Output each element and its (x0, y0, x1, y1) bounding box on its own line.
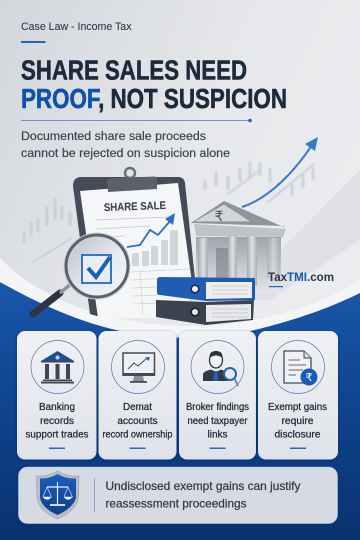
white wave band (0, 258, 360, 345)
card label: disclosure (274, 430, 321, 440)
brand logo: TaxTMI.com (268, 272, 334, 284)
bottom binder (156, 300, 254, 325)
bank building (191, 201, 286, 293)
document trend arrow (127, 213, 175, 247)
blue wave base (0, 282, 360, 540)
card: broker findings (179, 331, 256, 460)
document table (130, 269, 191, 314)
paper (80, 183, 194, 318)
background diagonal bands (230, 170, 360, 300)
binders (156, 277, 255, 325)
card label: Banking (39, 402, 75, 413)
rupee symbol: ₹ (215, 208, 224, 224)
callout text: Undisclosed exempt gains can justify (106, 479, 300, 493)
title line 2: PROOF, NOT SUSPICION (21, 83, 287, 114)
card label: links (208, 430, 228, 440)
card label: Broker findings (186, 402, 249, 413)
accent rule (21, 41, 46, 43)
entablature (194, 224, 286, 237)
columns (198, 236, 280, 286)
card accent (49, 448, 65, 449)
icon: document with rupee: ₹ (306, 372, 312, 384)
card label: need taxpayer (188, 416, 248, 427)
clip (107, 168, 157, 192)
card label: require (282, 416, 314, 427)
title rule (21, 119, 252, 122)
pediment (191, 201, 286, 228)
grey arrow behind (33, 163, 315, 262)
card label: record ownership (102, 430, 173, 440)
subtitle: Documented share sale proceeds (21, 129, 206, 143)
subtitle line 2: cannot be rejected on suspicion alone (21, 146, 230, 160)
clipboard (73, 168, 197, 318)
card label: Exempt gains (268, 402, 327, 413)
card accent (290, 448, 306, 449)
document title: SHARE SALE (104, 200, 166, 214)
card label: records (40, 416, 74, 427)
icon: monitor chart (112, 340, 164, 394)
card accent (130, 448, 146, 449)
card: banking records (17, 331, 96, 460)
icon: shield with scales (36, 471, 79, 519)
top binder (157, 277, 255, 301)
card: demat accounts (98, 331, 176, 460)
category label: Case Law - Income Tax (21, 21, 132, 33)
title: SHARE SALES NEED (21, 54, 247, 86)
document lines (95, 217, 170, 238)
callout text: reassessment proceedings (106, 496, 246, 510)
card label: Demat (123, 402, 152, 413)
callout panel (18, 467, 338, 524)
header text block (21, 21, 287, 160)
icon: bank (31, 340, 84, 394)
card accent (210, 448, 226, 449)
check box (82, 255, 111, 283)
icon: broker with magnifier (191, 340, 244, 394)
divider (93, 478, 96, 512)
bars (132, 230, 178, 266)
blue growth arrow (242, 137, 318, 207)
card label: support trades (26, 430, 88, 440)
faint candlestick chart left (24, 162, 313, 243)
card: exempt gains (258, 331, 338, 460)
card label: accounts (118, 416, 158, 427)
magnifying glass (33, 233, 130, 314)
